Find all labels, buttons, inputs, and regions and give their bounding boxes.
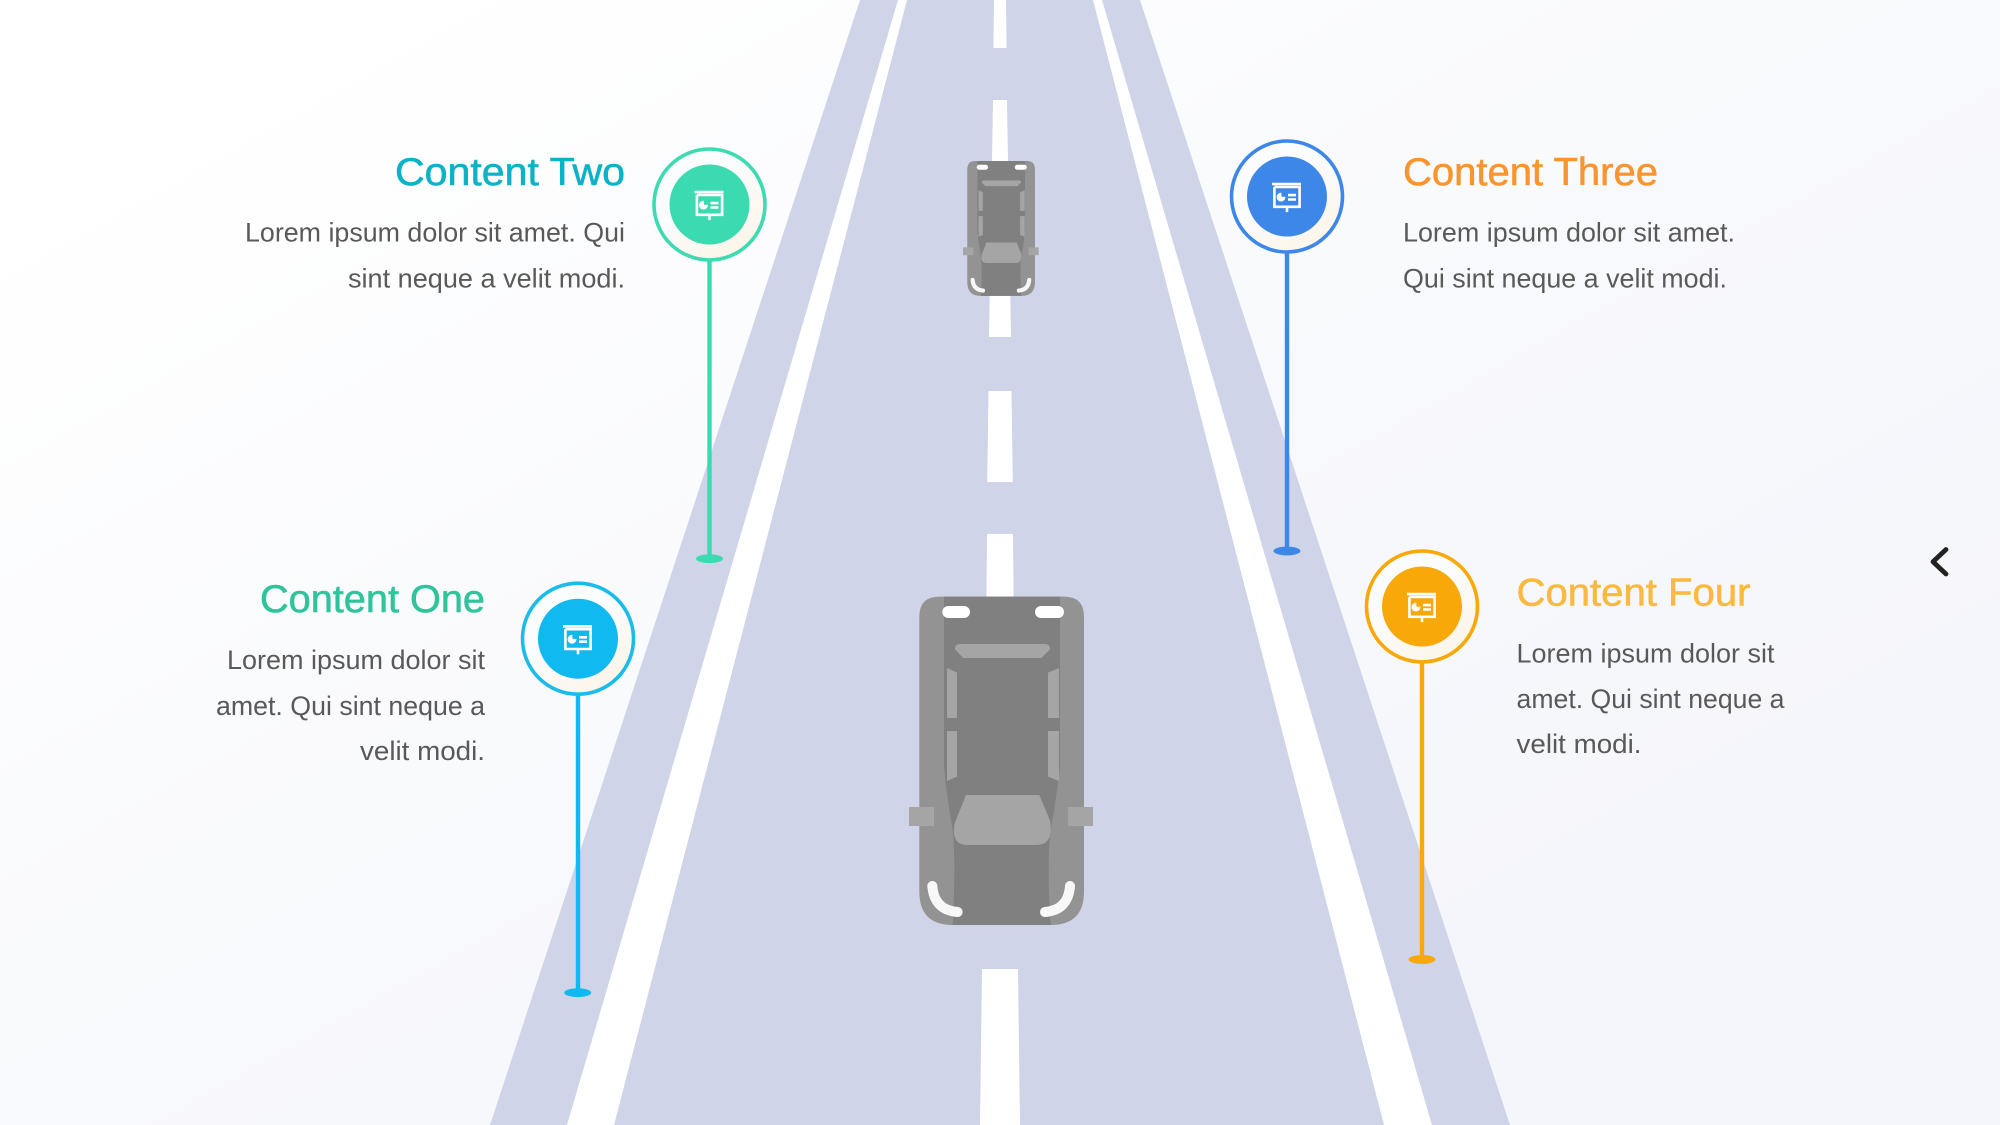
right edge line — [1093, 0, 1432, 1125]
text: content one: amet. Qui sint neque a — [216, 691, 486, 721]
left edge line — [567, 0, 907, 1125]
icon: presentation board — [1272, 184, 1301, 212]
centre dashes — [980, 0, 1020, 1125]
text: content three — [1403, 151, 1735, 293]
text: content three: Qui sint neque a velit modi. — [1403, 263, 1727, 293]
icon: back chevron — [1933, 550, 1946, 574]
text: content four: amet. Qui sint neque a — [1516, 684, 1785, 714]
text: content four: velit modi. — [1516, 729, 1642, 759]
text: content three: Content Three — [1403, 151, 1658, 194]
pin: content three — [1232, 141, 1342, 555]
large car — [909, 597, 1093, 925]
pin: content two — [654, 149, 765, 563]
pin: content four — [1366, 551, 1478, 964]
small car — [963, 161, 1039, 296]
text: content four: Content Four — [1516, 572, 1751, 615]
text: content one — [216, 578, 486, 766]
text: content two — [245, 151, 625, 293]
text: content two: sint neque a velit modi. — [348, 263, 625, 293]
text: content two: Content Two — [395, 151, 625, 194]
text: content one: velit modi. — [360, 736, 485, 766]
text: content four — [1516, 572, 1785, 759]
road — [490, 0, 1510, 1125]
pin: content one — [522, 583, 634, 997]
icon: presentation board — [1407, 594, 1436, 622]
icon: presentation board — [563, 626, 592, 654]
text: content two: Lorem ipsum dolor sit amet. Qui — [245, 218, 625, 248]
icon: presentation board — [694, 192, 724, 220]
text: content one: Lorem ipsum dolor sit — [227, 645, 485, 675]
text: content three: Lorem ipsum dolor sit amet. — [1403, 218, 1735, 248]
text: content one: Content One — [260, 578, 485, 621]
text: content four: Lorem ipsum dolor sit — [1516, 639, 1775, 669]
